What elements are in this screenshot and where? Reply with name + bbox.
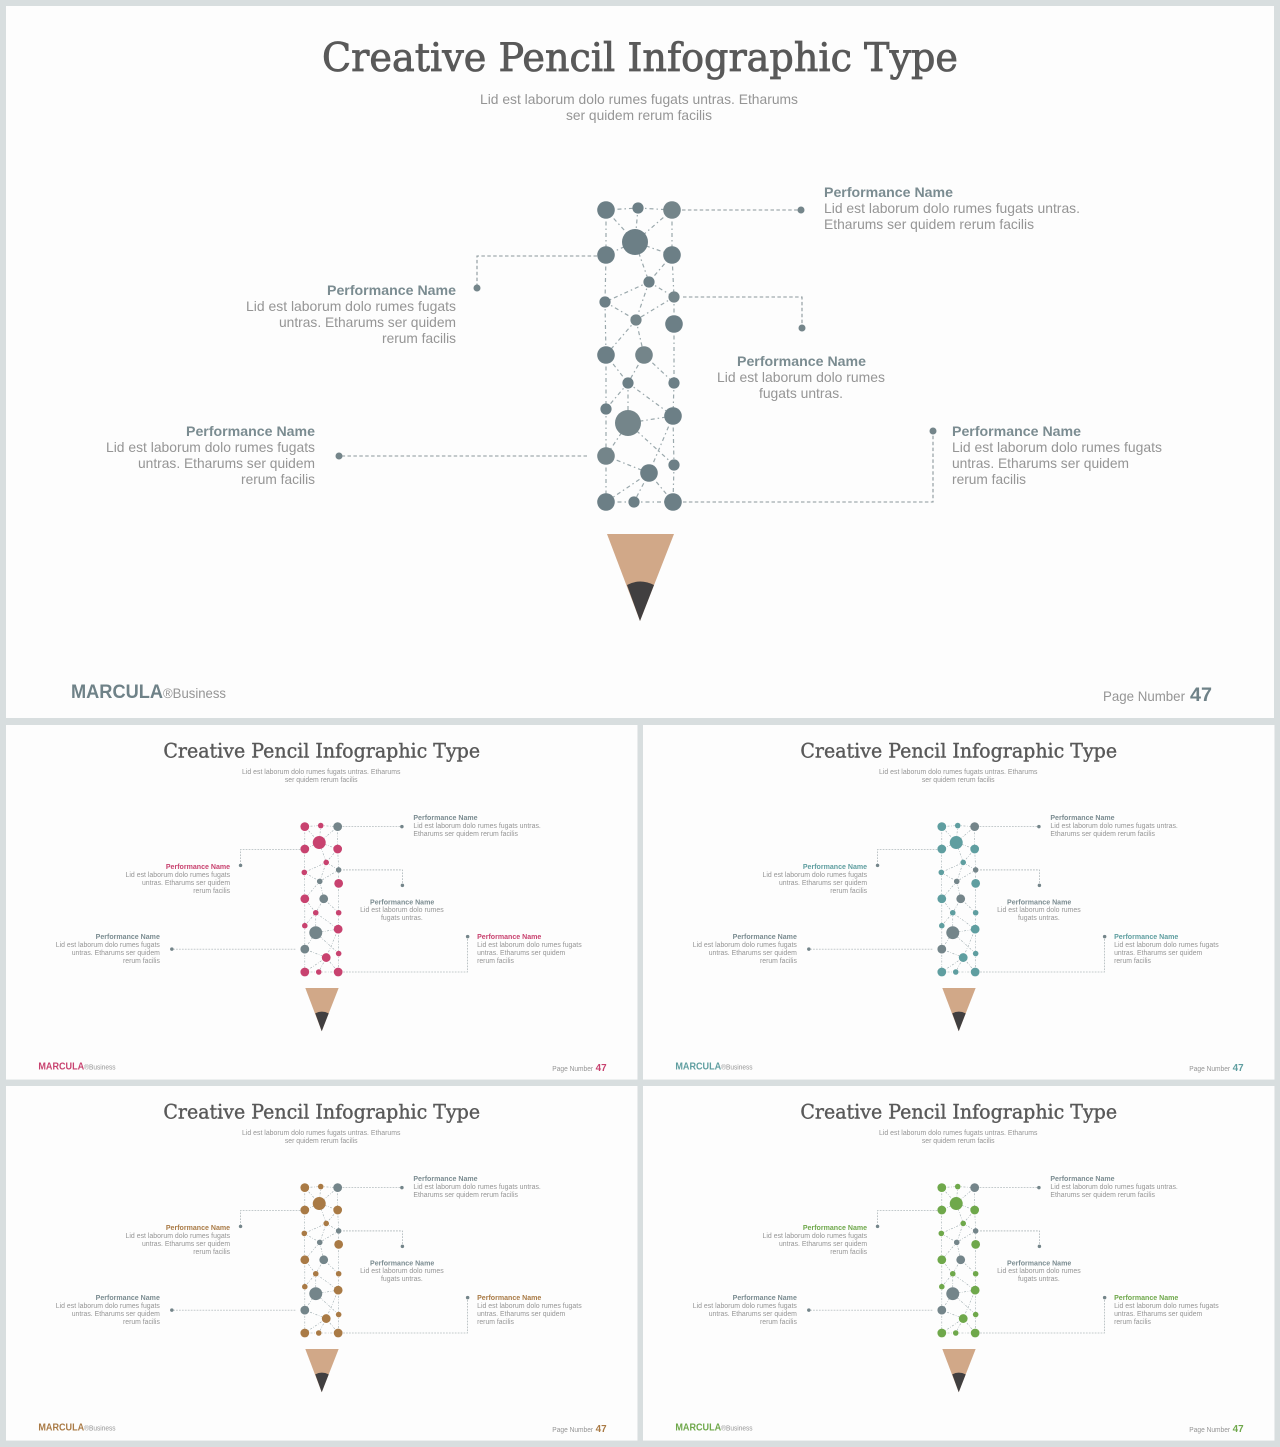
- page number: 47: [1233, 1063, 1244, 1074]
- callout: middle right: [997, 899, 1081, 922]
- callout: top right: Performance Name: [413, 1176, 478, 1183]
- callout: middle right: fugats untras.: [759, 385, 843, 401]
- callout: top right: Performance Name: [1050, 815, 1115, 822]
- callout: middle right: fugats untras.: [1018, 915, 1060, 922]
- callout: upper left: Lid est laborum dolo rumes fugats: [246, 298, 456, 314]
- connector lines: [336, 206, 936, 502]
- panel: pink variant slide: [6, 725, 637, 1080]
- callout: top right: Performance Name: [413, 815, 478, 822]
- callout: upper left: [246, 282, 456, 346]
- callout: lower left: untras. Etharums ser quidem: [72, 950, 160, 957]
- page number: 47: [1233, 1424, 1244, 1435]
- title: Creative Pencil Infographic Type: [163, 1100, 480, 1123]
- callout: upper left: Lid est laborum dolo rumes fugats: [126, 872, 231, 879]
- pencil tip: [305, 1349, 339, 1392]
- callout: top right: Etharums ser quidem rerum facilis: [824, 216, 1034, 232]
- subtitle: Lid est laborum dolo rumes fugats untras. Etharums: [879, 769, 1038, 776]
- brand logo: ®Business: [84, 1425, 116, 1433]
- callout: lower right: Performance Name: [1114, 934, 1178, 941]
- callout: lower right: untras. Etharums ser quidem: [1114, 950, 1202, 957]
- network pencil body: [937, 822, 980, 976]
- connector lines: [170, 1186, 469, 1333]
- subtitle: Lid est laborum dolo rumes fugats untras. Etharums: [879, 1130, 1038, 1137]
- callout: middle right: [717, 353, 885, 401]
- callout: middle right: Performance Name: [1007, 1260, 1071, 1267]
- callout: upper left: Performance Name: [166, 864, 230, 871]
- callout: lower left: Performance Name: [186, 423, 315, 439]
- panel: teal variant slide: [643, 725, 1274, 1080]
- callout: middle right: Lid est laborum dolo rumes: [997, 907, 1081, 914]
- callout: lower right: [1114, 1295, 1219, 1326]
- callout: upper left: untras. Etharums ser quidem: [779, 1241, 867, 1248]
- subtitle: [879, 769, 1038, 784]
- callout: lower right: Performance Name: [1114, 1295, 1178, 1302]
- callout: upper left: rerum facilis: [193, 1249, 231, 1256]
- subtitle: ser quidem rerum facilis: [566, 107, 712, 123]
- callout: upper left: Lid est laborum dolo rumes fugats: [763, 872, 868, 879]
- callout: lower left: rerum facilis: [760, 958, 797, 965]
- page number: 47: [596, 1424, 607, 1435]
- callout: upper left: Performance Name: [803, 864, 867, 871]
- callout: lower left: Lid est laborum dolo rumes fugats: [56, 1303, 160, 1310]
- callout: upper left: [763, 1225, 868, 1256]
- brand logo: MARCULA: [38, 1062, 84, 1073]
- network pencil body: [597, 201, 683, 511]
- callout: top right: Etharums ser quidem rerum facilis: [1050, 831, 1155, 838]
- callout: middle right: Lid est laborum dolo rumes: [360, 1268, 444, 1275]
- callout: middle right: [360, 899, 444, 922]
- callout: lower left: Lid est laborum dolo rumes fugats: [56, 942, 160, 949]
- callout: top right: Etharums ser quidem rerum facilis: [413, 1192, 518, 1199]
- callout: lower right: rerum facilis: [952, 471, 1026, 487]
- callout: lower right: Lid est laborum dolo rumes fugats: [477, 942, 582, 949]
- page number: Page Number: [1103, 688, 1185, 704]
- callout: lower right: Lid est laborum dolo rumes fugats: [1114, 1303, 1219, 1310]
- callout: middle right: [360, 1260, 444, 1283]
- callout: lower right: Performance Name: [477, 1295, 541, 1302]
- subtitle: ser quidem rerum facilis: [922, 1138, 995, 1145]
- callout: lower left: [693, 1295, 797, 1326]
- callout: top right: Lid est laborum dolo rumes fugats untras.: [1050, 823, 1178, 830]
- page number: [1189, 1424, 1244, 1435]
- page number: Page Number: [552, 1066, 594, 1073]
- callout: lower right: Performance Name: [477, 934, 541, 941]
- subtitle: Lid est laborum dolo rumes fugats untras. Etharums: [242, 769, 401, 776]
- connector lines: [807, 825, 1106, 972]
- callout: lower left: Lid est laborum dolo rumes fugats: [693, 1303, 797, 1310]
- callout: middle right: Performance Name: [370, 899, 434, 906]
- pencil tip: [305, 988, 339, 1031]
- brand logo: [71, 681, 226, 703]
- callout: top right: Lid est laborum dolo rumes fugats untras.: [413, 1184, 541, 1191]
- callout: lower right: rerum facilis: [477, 958, 514, 965]
- callout: top right: [824, 184, 1080, 232]
- callout: middle right: Lid est laborum dolo rumes: [717, 369, 885, 385]
- title: Creative Pencil Infographic Type: [800, 739, 1117, 762]
- callout: top right: Performance Name: [1050, 1176, 1115, 1183]
- callout: top right: Lid est laborum dolo rumes fugats untras.: [1050, 1184, 1178, 1191]
- callout: lower left: Performance Name: [733, 934, 797, 941]
- page number: [552, 1063, 607, 1074]
- subtitle: [242, 769, 401, 784]
- page number: 47: [596, 1063, 607, 1074]
- callout: upper left: untras. Etharums ser quidem: [142, 880, 230, 887]
- panel: main slide: [6, 6, 1274, 718]
- callout: middle right: fugats untras.: [381, 1276, 423, 1283]
- title: Creative Pencil Infographic Type: [322, 36, 958, 81]
- brand logo: MARCULA: [38, 1423, 84, 1434]
- callout: middle right: Performance Name: [370, 1260, 434, 1267]
- callout: upper left: untras. Etharums ser quidem: [779, 880, 867, 887]
- brand logo: MARCULA: [71, 681, 163, 703]
- title: Creative Pencil Infographic Type: [163, 739, 480, 762]
- callout: lower left: Lid est laborum dolo rumes fugats: [693, 942, 797, 949]
- callout: middle right: Lid est laborum dolo rumes: [360, 907, 444, 914]
- page number: Page Number: [552, 1427, 594, 1434]
- callout: lower left: rerum facilis: [760, 1319, 797, 1326]
- brand logo: [675, 1062, 753, 1073]
- callout: upper left: Lid est laborum dolo rumes fugats: [126, 1233, 231, 1240]
- page number: [552, 1424, 607, 1435]
- panel: green variant slide: [643, 1086, 1274, 1441]
- callout: lower right: rerum facilis: [477, 1319, 514, 1326]
- callout: top right: [1050, 815, 1178, 838]
- callout: upper left: Performance Name: [327, 282, 456, 298]
- subtitle: [242, 1130, 401, 1145]
- brand logo: ®Business: [84, 1064, 116, 1072]
- callout: lower left: rerum facilis: [123, 1319, 160, 1326]
- callout: lower left: rerum facilis: [123, 958, 160, 965]
- pencil tip: [942, 988, 976, 1031]
- callout: top right: Lid est laborum dolo rumes fugats untras.: [413, 823, 541, 830]
- callout: lower right: untras. Etharums ser quidem: [477, 1311, 565, 1318]
- callout: lower left: Performance Name: [733, 1295, 797, 1302]
- callout: upper left: rerum facilis: [382, 330, 456, 346]
- subtitle: [480, 91, 798, 123]
- subtitle: ser quidem rerum facilis: [285, 777, 358, 784]
- subtitle: ser quidem rerum facilis: [285, 1138, 358, 1145]
- callout: middle right: fugats untras.: [1018, 1276, 1060, 1283]
- pencil tip: [607, 534, 674, 621]
- brand logo: ®Business: [721, 1064, 753, 1072]
- subtitle: Lid est laborum dolo rumes fugats untras. Etharums: [242, 1130, 401, 1137]
- callout: top right: [413, 1176, 541, 1199]
- page number: [1103, 684, 1212, 706]
- page number: Page Number: [1189, 1427, 1231, 1434]
- page number: [1189, 1063, 1244, 1074]
- callout: upper left: Lid est laborum dolo rumes fugats: [763, 1233, 868, 1240]
- callout: lower right: rerum facilis: [1114, 1319, 1151, 1326]
- callout: upper left: untras. Etharums ser quidem: [279, 314, 456, 330]
- callout: upper left: [126, 1225, 231, 1256]
- callout: lower right: Lid est laborum dolo rumes fugats: [1114, 942, 1219, 949]
- callout: top right: [413, 815, 541, 838]
- subtitle: Lid est laborum dolo rumes fugats untras. Etharums: [480, 91, 798, 107]
- brand logo: MARCULA: [675, 1062, 721, 1073]
- callout: upper left: Performance Name: [166, 1225, 230, 1232]
- callout: upper left: Performance Name: [803, 1225, 867, 1232]
- callout: lower left: untras. Etharums ser quidem: [709, 950, 797, 957]
- callout: lower right: untras. Etharums ser quidem: [1114, 1311, 1202, 1318]
- callout: lower left: [56, 934, 160, 965]
- pencil tip: [942, 1349, 976, 1392]
- callout: top right: [1050, 1176, 1178, 1199]
- callout: lower left: [56, 1295, 160, 1326]
- callout: lower right: [952, 423, 1162, 487]
- callout: lower right: untras. Etharums ser quidem: [952, 455, 1129, 471]
- callout: top right: Etharums ser quidem rerum facilis: [1050, 1192, 1155, 1199]
- callout: middle right: Performance Name: [737, 353, 866, 369]
- callout: lower right: Lid est laborum dolo rumes fugats: [477, 1303, 582, 1310]
- brand logo: MARCULA: [675, 1423, 721, 1434]
- callout: middle right: fugats untras.: [381, 915, 423, 922]
- callout: top right: Etharums ser quidem rerum facilis: [413, 831, 518, 838]
- callout: top right: Performance Name: [824, 184, 953, 200]
- brand logo: [38, 1062, 116, 1073]
- callout: lower left: untras. Etharums ser quidem: [72, 1311, 160, 1318]
- brand logo: ®Business: [721, 1425, 753, 1433]
- brand logo: ®Business: [163, 685, 226, 701]
- callout: middle right: Lid est laborum dolo rumes: [997, 1268, 1081, 1275]
- callout: top right: Lid est laborum dolo rumes fugats untras.: [824, 200, 1080, 216]
- callout: lower left: untras. Etharums ser quidem: [709, 1311, 797, 1318]
- subtitle: ser quidem rerum facilis: [922, 777, 995, 784]
- callout: lower left: Performance Name: [96, 934, 160, 941]
- callout: lower right: Lid est laborum dolo rumes fugats: [952, 439, 1162, 455]
- callout: upper left: [126, 864, 231, 895]
- network pencil body: [300, 822, 343, 976]
- callout: upper left: rerum facilis: [830, 1249, 868, 1256]
- callout: lower right: [1114, 934, 1219, 965]
- subtitle: [879, 1130, 1038, 1145]
- callout: lower right: rerum facilis: [1114, 958, 1151, 965]
- brand logo: [38, 1423, 116, 1434]
- callout: lower left: rerum facilis: [241, 471, 315, 487]
- callout: lower left: untras. Etharums ser quidem: [138, 455, 315, 471]
- brand logo: [675, 1423, 753, 1434]
- callout: upper left: untras. Etharums ser quidem: [142, 1241, 230, 1248]
- connector lines: [807, 1186, 1106, 1333]
- callout: upper left: rerum facilis: [830, 888, 868, 895]
- callout: middle right: [997, 1260, 1081, 1283]
- panel: brown variant slide: [6, 1086, 637, 1441]
- callout: upper left: [763, 864, 868, 895]
- callout: lower left: Performance Name: [96, 1295, 160, 1302]
- callout: lower right: [477, 1295, 582, 1326]
- callout: lower right: [477, 934, 582, 965]
- callout: middle right: Performance Name: [1007, 899, 1071, 906]
- callout: lower left: Lid est laborum dolo rumes fugats: [106, 439, 315, 455]
- callout: lower right: Performance Name: [952, 423, 1081, 439]
- callout: lower right: untras. Etharums ser quidem: [477, 950, 565, 957]
- network pencil body: [300, 1183, 343, 1337]
- callout: lower left: [106, 423, 315, 487]
- connector lines: [170, 825, 469, 972]
- callout: upper left: rerum facilis: [193, 888, 231, 895]
- title: Creative Pencil Infographic Type: [800, 1100, 1117, 1123]
- callout: lower left: [693, 934, 797, 965]
- network pencil body: [937, 1183, 980, 1337]
- page number: 47: [1190, 684, 1212, 706]
- page number: Page Number: [1189, 1066, 1231, 1073]
